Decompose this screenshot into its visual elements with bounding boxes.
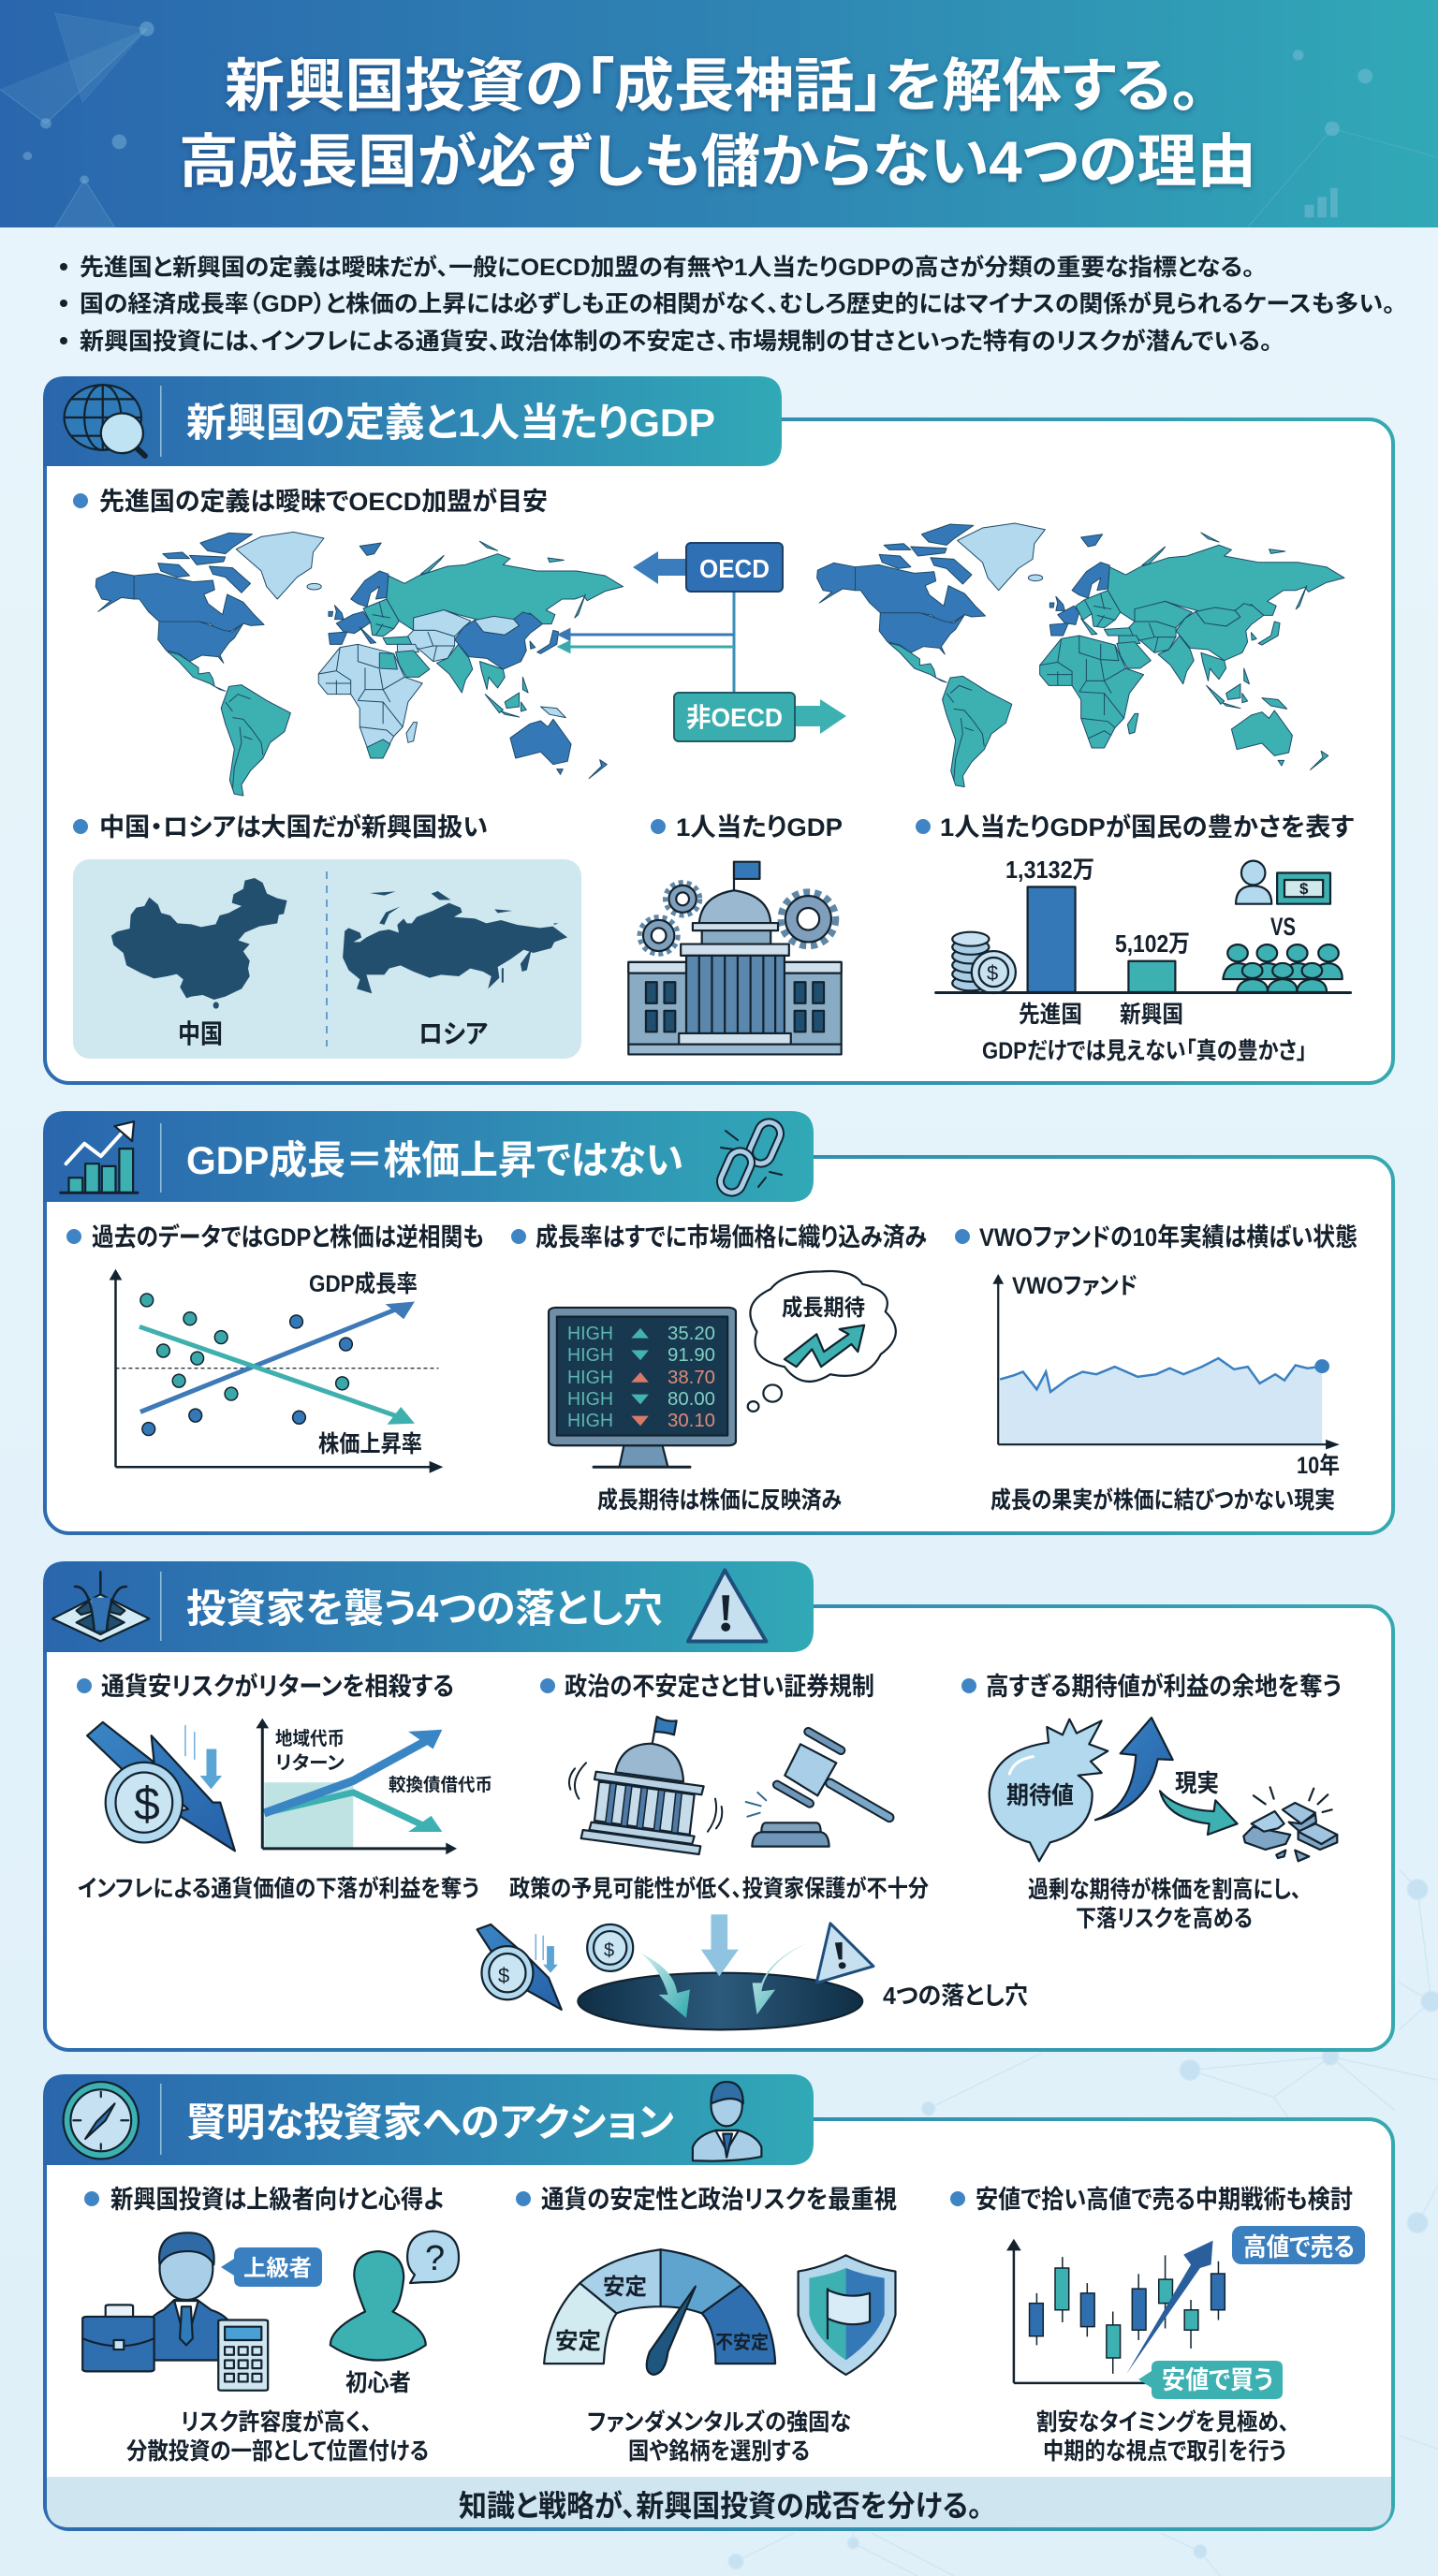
legend: 非OECD: 非OECD [686, 703, 783, 732]
subheading: 織り込み済み: 成長率はすでに市場価格に織り込み済み [536, 1223, 927, 1251]
caption: 成長の果実: 成長の果実が株価に結びつかない現実 [990, 1486, 1335, 1514]
icon: compass [64, 2082, 139, 2159]
legend: 非OECD [674, 693, 846, 741]
icon: stock monitor: HIGH [567, 1345, 613, 1366]
China and Russia map card: 中国 [178, 1019, 223, 1048]
icon: tilted capitol [569, 1717, 722, 1854]
caption: リスク許容度 [126, 2408, 429, 2465]
icon: stock monitor: HIGH [567, 1411, 613, 1431]
callout: 安値で買う: 安値で買う [1162, 2366, 1273, 2394]
subheading: 上級者: 新興国投資は上級者向けと心得よ [110, 2186, 444, 2214]
icon: investor in suit [693, 2082, 761, 2161]
bar chart: GDP per capita [936, 856, 1351, 1028]
icon: bursting expectation bubble [990, 1718, 1337, 1861]
footer band [47, 2477, 1391, 2527]
chart: local currency return: 較換債借代币 [389, 1774, 492, 1795]
bar chart: GDP per capita: 先進国 [1019, 1002, 1082, 1028]
chart: VWO line [992, 1273, 1340, 1479]
chart: stability gauge [544, 2249, 775, 2375]
icon: four pitfalls hole: $ [604, 1940, 614, 1961]
panel title: 投資家を襲う4つの落とし穴 [186, 1587, 663, 1631]
icon: person and banknote [1236, 861, 1330, 904]
icon: four pitfalls hole: $ [498, 1964, 509, 1987]
icon: beginner with question [330, 2232, 459, 2396]
chart: VWO line: 10年 [1297, 1453, 1340, 1479]
caption: タイミング [1036, 2408, 1289, 2465]
caption: ファンダメンタルズ: ファンダメンタルズの強固な [587, 2408, 851, 2436]
panel: 投資家を襲う4つの落とし穴 [43, 1561, 1393, 2050]
caption: 投資家保護: 政策の予見可能性が低く、投資家保護が不十分 [509, 1875, 929, 1902]
caption: ファンダメンタルズ: 国や銘柄を選別する [628, 2438, 810, 2465]
chart: scatter GDP vs stock [110, 1269, 443, 1473]
chart: local currency return [256, 1719, 492, 1854]
title [179, 54, 1256, 195]
caption: リスク許容度: リスク許容度が高く、 [181, 2408, 372, 2436]
bar chart: GDP per capita: $ [987, 961, 998, 985]
thought bubble: 成長期待 [748, 1271, 896, 1412]
caption: ファンダメンタルズ [587, 2408, 851, 2465]
chart: scatter GDP vs stock: GDP成長率 [309, 1271, 418, 1297]
China and Russia map card: ロシア [418, 1019, 488, 1048]
panel: 賢明な投資家へのアクション [43, 2074, 1393, 2529]
panel title: 賢明な投資家へのアクション [186, 2100, 674, 2144]
caption: 割高: 過剰な期待が株価を割高にし、 [1028, 1876, 1301, 1903]
icon: beginner with question: 初心者 [345, 2370, 411, 2396]
subheading: 中国・ロシア: 中国・ロシアは大国だが新興国扱い [99, 812, 488, 842]
bar chart: GDP per capita: 新興国 [1120, 1002, 1183, 1028]
icon: four pitfalls hole: 4つの落とし穴 [883, 1982, 1028, 2010]
map: non-OECD world map right [817, 523, 1344, 787]
icon: gavel [746, 1732, 889, 1847]
icon: falling currency [87, 1722, 235, 1851]
icon: stock monitor: 80.00 [668, 1389, 715, 1410]
caption: タイミング: 中期的な視点で取引を行う [1043, 2438, 1286, 2465]
thought bubble: 成長期待: 成長期待 [782, 1295, 865, 1321]
callout: 高値で売る: 高値で売る [1243, 2233, 1355, 2261]
icon: stock monitor: 35.20 [668, 1324, 715, 1344]
chart: VWO line: VWOファンド [1012, 1273, 1137, 1299]
background network pattern [728, 2048, 1438, 2576]
icon: warning triangle [688, 1570, 766, 1642]
caption: 割高: 下落リスクを高める [1076, 1906, 1253, 1932]
callout: 安値で買う [1138, 2361, 1283, 2399]
footer band: 知識と戦略が、新興国投資の成否を分ける。 [459, 2489, 982, 2523]
icon: government building with gears [628, 862, 842, 1054]
icon: stock monitor: 38.70 [668, 1368, 715, 1388]
map: OECD world map left [95, 532, 624, 796]
icon: coin stack [952, 932, 1016, 993]
icon: globe and magnifier [65, 385, 145, 456]
icon: crowd [1223, 944, 1343, 992]
China and Russia map card [73, 859, 581, 1059]
icon: advanced investor with briefcase and calculator [82, 2232, 322, 2391]
caption: 通貨価値: インフレによる通貨価値の下落が利益を奪う [78, 1875, 479, 1902]
icon: four pitfalls hole [477, 1914, 1028, 2029]
callout: 上級者 [221, 2247, 322, 2287]
caption: リスク許容度: 分散投資の一部として位置付ける [126, 2438, 429, 2465]
icon: pitfall [52, 1572, 149, 1641]
icon: shield with flag [799, 2255, 895, 2375]
header decoration [0, 13, 1438, 227]
header banner [0, 0, 1438, 227]
subheading: 政治: 政治の不安定さと甘い証券規制 [565, 1673, 874, 1701]
panel title: GDP成長＝株価上昇ではない [186, 1138, 683, 1182]
icon: bursting expectation bubble: 現実 [1175, 1769, 1219, 1797]
icon: stock monitor: 91.90 [668, 1345, 715, 1366]
subheading: OECD: 先進国の定義は曖昧でOECD加盟が目安 [99, 487, 548, 516]
summary bullets: 新興国投資には、インフレによる通貨安、政治体制の不安定さ、市場規制の甘さといった特有のリスクが潜んでいる。 [80, 328, 1272, 355]
chart: stability gauge: 安定 [555, 2329, 601, 2354]
callout: 高値で売る [1232, 2226, 1365, 2264]
chart: candlestick [1006, 2226, 1365, 2399]
icon: beginner with question: ? [425, 2239, 445, 2278]
subheading: 国民の豊かさ: 1人当たりGDPが国民の豊かさを表す [940, 812, 1354, 842]
legend: OECD: OECD [699, 554, 770, 583]
subheading: VWO: VWOファンドの10年実績は横ばい状態 [979, 1223, 1357, 1251]
legend: OECD [633, 543, 783, 592]
bar chart: GDP per capita: 5,102万 [1115, 929, 1190, 958]
subheading: 1人当たりGDP: 1人当たりGDP [676, 813, 843, 842]
panel: 新興国の定義と1人当たりGDP [43, 376, 1393, 1083]
callout: 上級者: 上級者 [243, 2256, 312, 2281]
icon: falling currency: $ [134, 1778, 160, 1830]
bar chart: GDP per capita: 1,3132万 [1005, 856, 1094, 884]
chart: stability gauge: 安定 [603, 2275, 647, 2300]
title: 高成長国が必ずしも儲からない4つの理由 [179, 130, 1256, 195]
panel: GDP成長＝株価上昇ではない [43, 1111, 1393, 1533]
icon: stock monitor: HIGH [567, 1324, 613, 1344]
caption: タイミング: 割安なタイミングを見極め、 [1036, 2408, 1289, 2436]
icon: bursting expectation bubble: 期待値 [1006, 1781, 1074, 1809]
icon: broken chain [717, 1119, 784, 1196]
icon: stock monitor: 30.10 [668, 1411, 715, 1431]
subheading: 逆相関: 過去のデータではGDPと株価は逆相関も [92, 1222, 484, 1251]
caption: 反映済み: 成長期待は株価に反映済み [597, 1487, 842, 1514]
connector lines from legend to map [560, 592, 734, 693]
chart: local currency return: リターン [275, 1752, 345, 1774]
summary bullets: 国の経済成長率（GDP）と株価の上昇には必ずしも正の相関がなく、むしろ歴史的にはマイナスの関係が見られるケースも多い。 [80, 290, 1395, 317]
chart: scatter GDP vs stock: 株価上昇率 [318, 1431, 422, 1457]
icon: stock monitor: HIGH [567, 1389, 613, 1410]
summary bullets [60, 254, 1395, 355]
subheading: 中期戦術: 安値で拾い高値で売る中期戦術も検討 [976, 2186, 1353, 2214]
title: 新興国投資の「成長神話」を解体する。 [225, 54, 1201, 119]
icon: stock monitor: HIGH [567, 1368, 613, 1388]
caption: 真の豊かさ: GDPだけでは見えない「真の豊かさ」 [982, 1038, 1307, 1064]
caption: 割高 [1028, 1876, 1301, 1932]
icon: rising chart [61, 1121, 138, 1193]
subheading: 期待値: 高すぎる期待値が利益の余地を奪う [986, 1672, 1342, 1701]
icon: stock monitor [549, 1308, 736, 1467]
bar chart: GDP per capita: VS [1270, 913, 1296, 941]
map: China and Russia silhouettes [111, 878, 567, 1009]
chart: stability gauge: 不安定 [715, 2332, 769, 2353]
subheading: 通貨安: 通貨安リスクがリターンを相殺する [101, 1672, 454, 1701]
chart: local currency return: 地域代币 [275, 1728, 345, 1749]
panel title: 新興国の定義と1人当たりGDP [186, 401, 715, 445]
bar chart: GDP per capita: $ [1299, 880, 1309, 898]
subheading: 通貨の安定性: 通貨の安定性と政治リスクを最重視 [541, 2186, 897, 2214]
summary bullets: 先進国と新興国の定義は曖昧だが、一般にOECD加盟の有無や1人当たりGDPの高さが分類の重要な指標となる。 [80, 254, 1255, 281]
background network right side [1399, 1869, 1438, 2029]
